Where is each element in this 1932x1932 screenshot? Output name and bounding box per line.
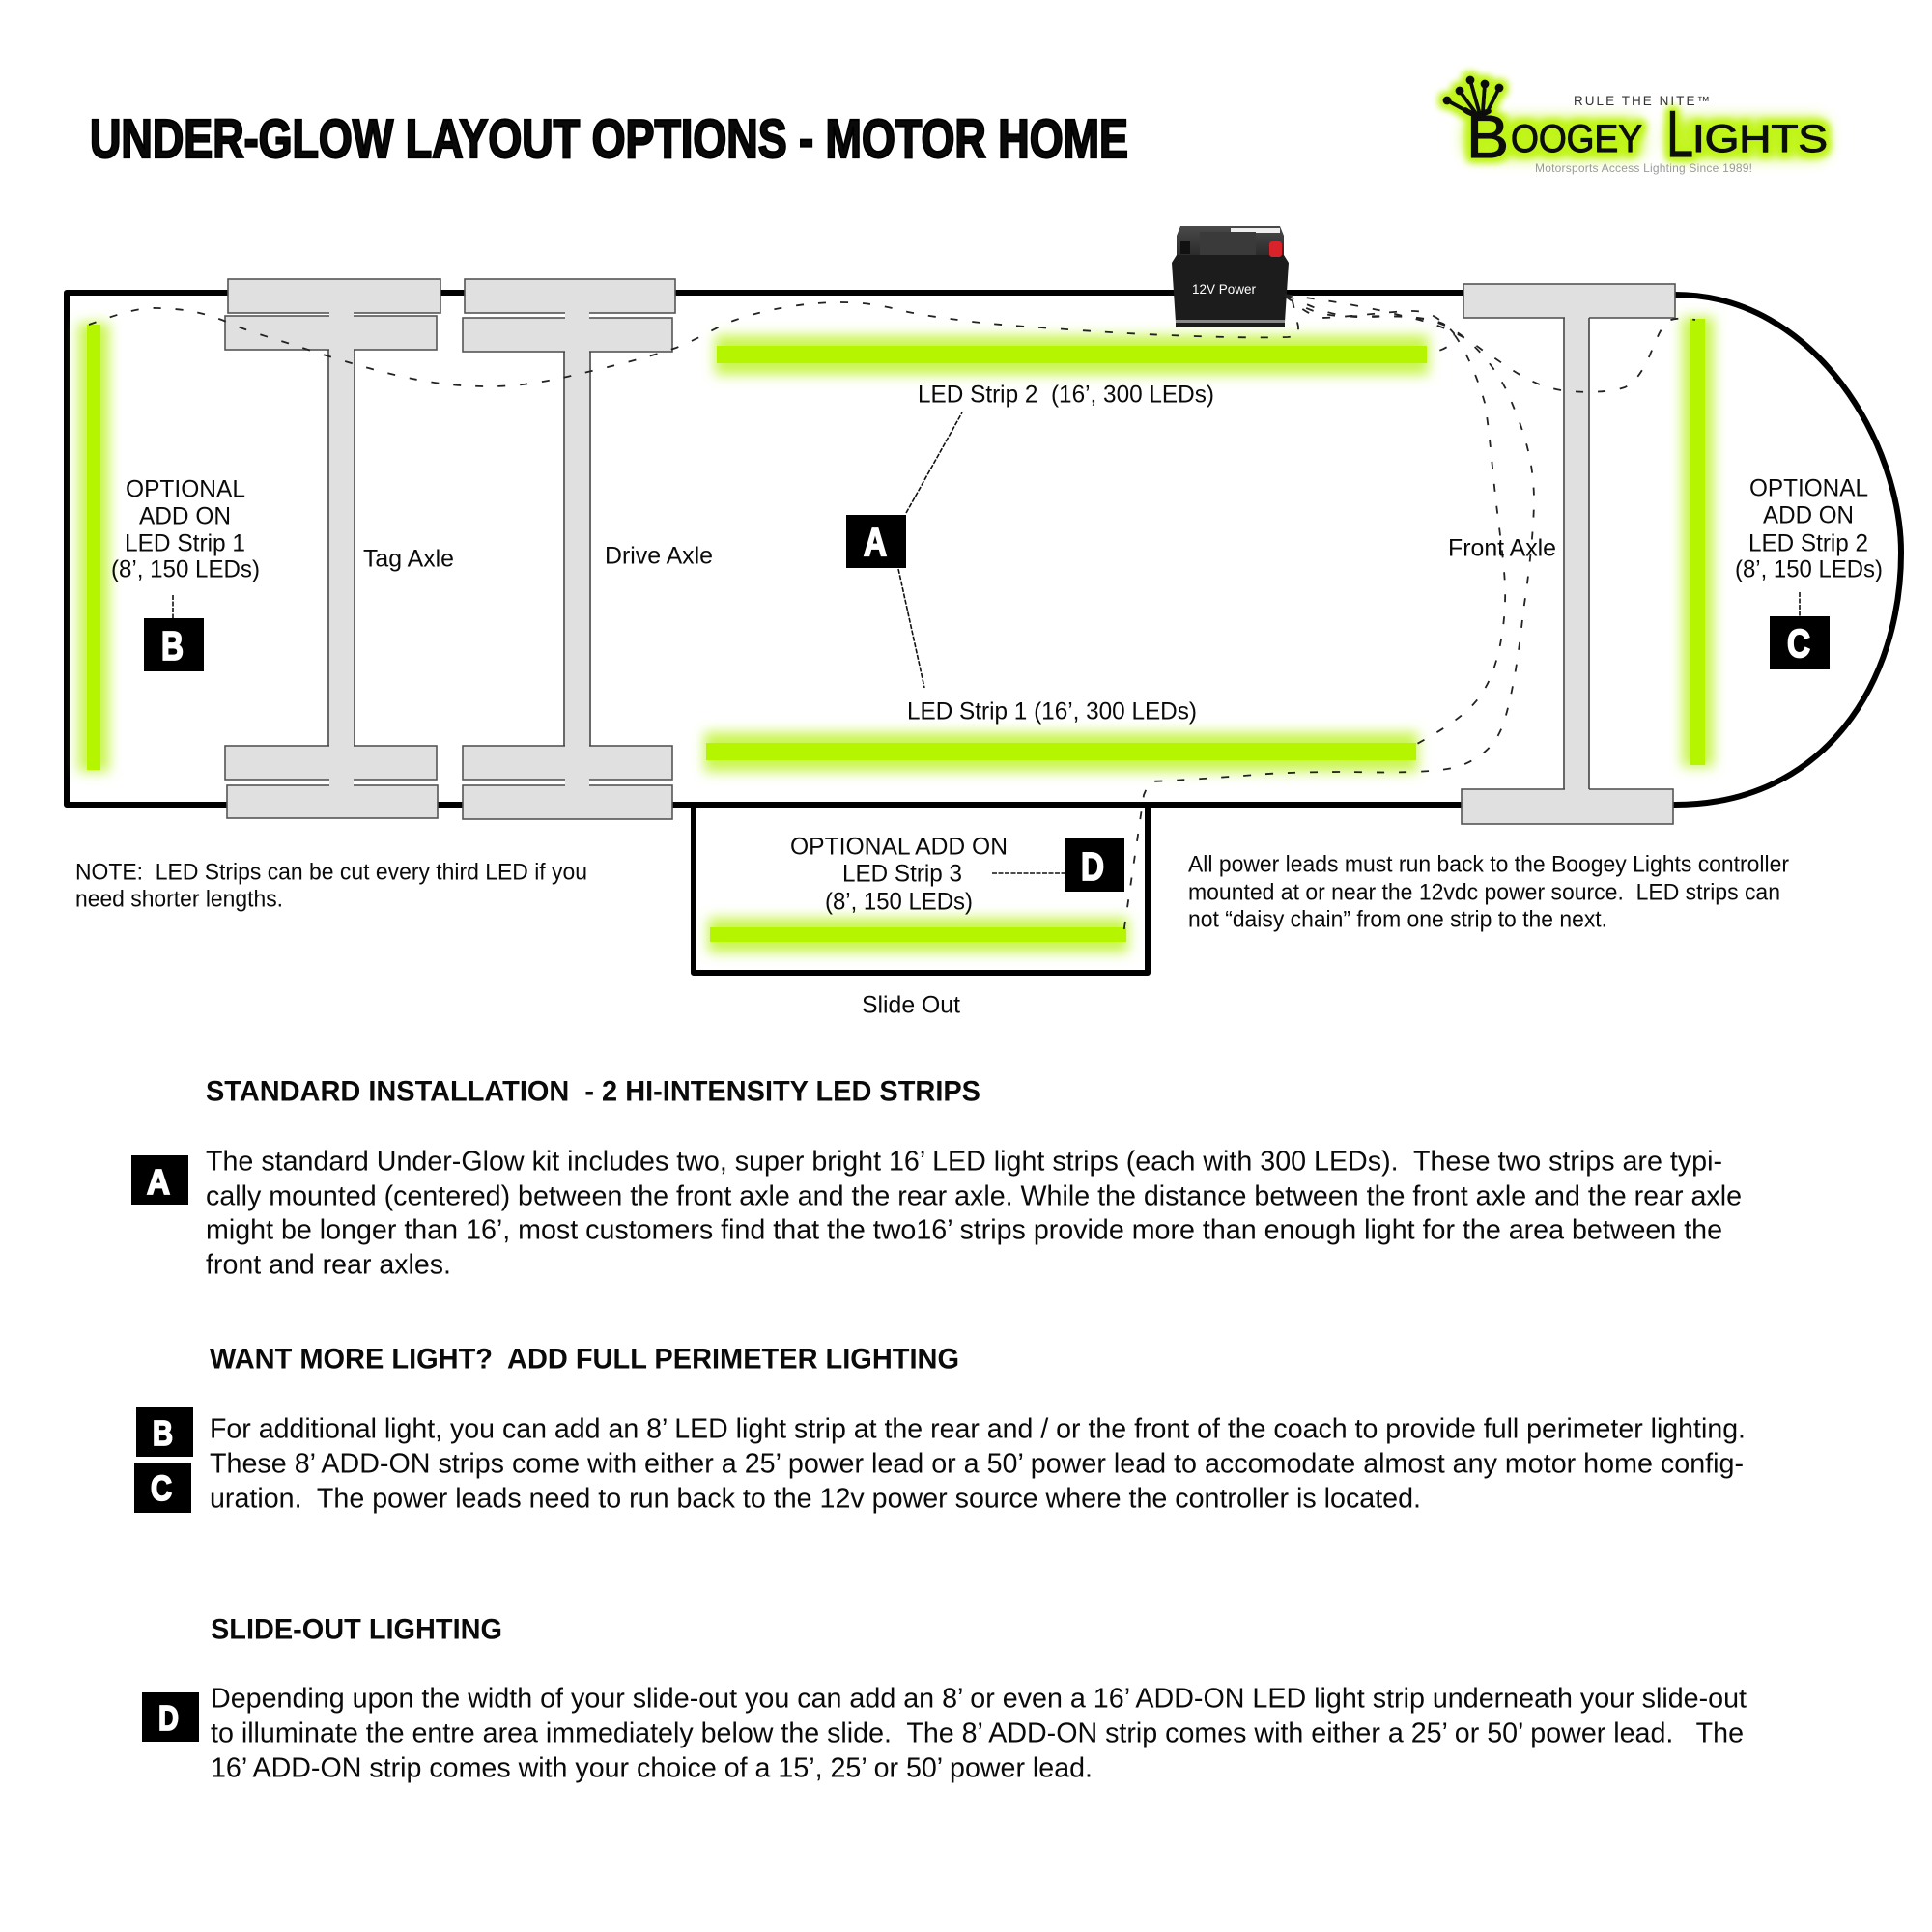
heading: STANDARD INSTALLATION - 2 HI-INTENSITY LED STRIPS	[206, 1076, 980, 1108]
badge C	[134, 1463, 191, 1513]
callout badge A	[846, 412, 962, 688]
label: optional add on strip 2: LED Strip 2	[1748, 530, 1868, 557]
body text: For additional light, you can add an 8’ LED light strip at the rear and / or the front of the coach to provide full perimeter lighting.	[210, 1414, 1746, 1445]
panel: motor home layout diagram	[67, 226, 1901, 1019]
note: cutting strips: NOTE: LED Strips can be cut every third LED if you	[75, 860, 587, 886]
logo subtitle: Motorsports Access Lighting Since 1989!	[1535, 161, 1752, 175]
body text: Depending upon the width of your slide-out you can add an 8’ or even a 16’ ADD-ON LED light strip underneath your slide-out	[211, 1684, 1747, 1715]
callout badge D	[992, 838, 1124, 892]
body text: to illuminate the entre area immediately below the slide. The 8’ ADD-ON strip comes with either a 25’ or 50’ power lead. The	[211, 1719, 1744, 1749]
badge D: D	[158, 1698, 179, 1738]
badge D	[142, 1692, 199, 1742]
body text	[210, 1414, 1746, 1515]
heading: SLIDE-OUT LIGHTING	[211, 1614, 502, 1646]
front axle	[1462, 284, 1675, 824]
logo tagline: RULE THE NITE™	[1574, 94, 1710, 108]
LED strip: front add-on	[1682, 317, 1714, 767]
section: standard installation	[131, 1076, 1742, 1281]
logo crown and wordmark	[1443, 75, 1828, 171]
label: optional add on strip 3	[790, 834, 1008, 916]
LED strip: rear add-on	[78, 323, 109, 772]
badge B: B	[153, 1413, 173, 1453]
note: cutting strips	[75, 860, 587, 913]
logo wordmark: OOGEY	[1511, 118, 1642, 160]
heading: WANT MORE LIGHT? ADD FULL PERIMETER LIGHTING	[210, 1344, 959, 1376]
note: power leads: All power leads must run back to the Boogey Lights controller	[1188, 852, 1789, 878]
label: optional add on strip 1: OPTIONAL	[126, 476, 245, 503]
label: tag axle: Tag Axle	[363, 546, 454, 573]
label: LED strip 1: LED Strip 1 (16’, 300 LEDs)	[907, 698, 1197, 725]
drive axle	[463, 279, 675, 819]
body text: front and rear axles.	[206, 1250, 451, 1281]
power lead wires	[89, 295, 1695, 934]
body text	[211, 1684, 1747, 1784]
label: front axle: Front Axle	[1448, 535, 1556, 562]
label: slide out: Slide Out	[862, 992, 960, 1019]
tag axle	[225, 279, 440, 818]
logo wordmark: B	[1466, 104, 1509, 171]
badge B	[136, 1407, 193, 1457]
badge C: C	[151, 1468, 172, 1508]
battery icon	[1172, 226, 1289, 327]
icon: crown	[1443, 75, 1503, 114]
battery label: 12V Power	[1192, 281, 1256, 297]
label: optional add on strip 3: (8’, 150 LEDs)	[825, 889, 973, 916]
body text	[206, 1147, 1742, 1281]
callout badge A: A	[864, 520, 887, 564]
label: optional add on strip 2	[1735, 475, 1883, 583]
label: optional add on strip 2: (8’, 150 LEDs)	[1735, 556, 1883, 583]
note: power leads: not “daisy chain” from one strip to the next.	[1188, 907, 1607, 933]
label: optional add on strip 1: LED Strip 1	[125, 530, 245, 557]
callout badge C	[1770, 592, 1830, 669]
section: slide-out lighting	[142, 1614, 1747, 1784]
note: power leads	[1188, 852, 1789, 933]
body text: uration. The power leads need to run back to the 12v power source where the controller is located.	[210, 1484, 1421, 1515]
note: power leads: mounted at or near the 12vdc power source. LED strips can	[1188, 880, 1780, 906]
body text: cally mounted (centered) between the front axle and the rear axle. While the distance between the front axle and the rear axle	[206, 1181, 1742, 1212]
callout badge D: D	[1081, 844, 1104, 889]
logo wordmark: L	[1666, 98, 1693, 171]
label: optional add on strip 3: OPTIONAL ADD ON	[790, 834, 1008, 861]
label: drive axle: Drive Axle	[605, 543, 713, 570]
vehicle outline	[67, 293, 1901, 805]
callout badge B	[144, 595, 204, 671]
label: LED strip 2: LED Strip 2 (16’, 300 LEDs)	[918, 382, 1214, 409]
LED strip: 1 standard	[704, 732, 1418, 772]
leader lines from A	[898, 412, 962, 688]
callout badge C: C	[1787, 621, 1810, 666]
LED strip: 2 standard	[715, 335, 1429, 375]
logo glow backdrop	[1464, 118, 1828, 158]
label: optional add on strip 2: ADD ON	[1763, 502, 1854, 529]
logo wordmark: IGHTS	[1692, 118, 1828, 160]
label: optional add on strip 1: ADD ON	[139, 503, 231, 530]
body text: The standard Under-Glow kit includes two, super bright 16’ LED light strips (each with 300 LEDs). These two strips are typi-	[206, 1147, 1722, 1178]
body text: 16’ ADD-ON strip comes with your choice of a 15’, 25’ or 50’ power lead.	[211, 1753, 1093, 1784]
LED strip: slide out add-on	[708, 918, 1128, 952]
body text: These 8’ ADD-ON strips come with either a 25’ power lead or a 50’ power lead to accomodate almost any motor home config-	[210, 1449, 1744, 1480]
body text: might be longer than 16’, most customers find that the two16’ strips provide more than enough light for the area between the	[206, 1215, 1722, 1246]
title: UNDER-GLOW LAYOUT OPTIONS - MOTOR HOME	[90, 108, 1128, 169]
label: optional add on strip 3: LED Strip 3	[842, 861, 962, 888]
logo: Boogey Lights	[1443, 75, 1828, 175]
slide out box	[694, 805, 1148, 973]
section: full perimeter lighting	[134, 1344, 1746, 1515]
badge A	[131, 1155, 188, 1205]
note: cutting strips: need shorter lengths.	[75, 887, 283, 913]
label: optional add on strip 1	[111, 476, 260, 583]
label: optional add on strip 1: (8’, 150 LEDs)	[111, 556, 260, 583]
label: optional add on strip 2: OPTIONAL	[1749, 475, 1868, 502]
callout badge B: B	[161, 623, 184, 668]
badge A: A	[147, 1162, 170, 1202]
